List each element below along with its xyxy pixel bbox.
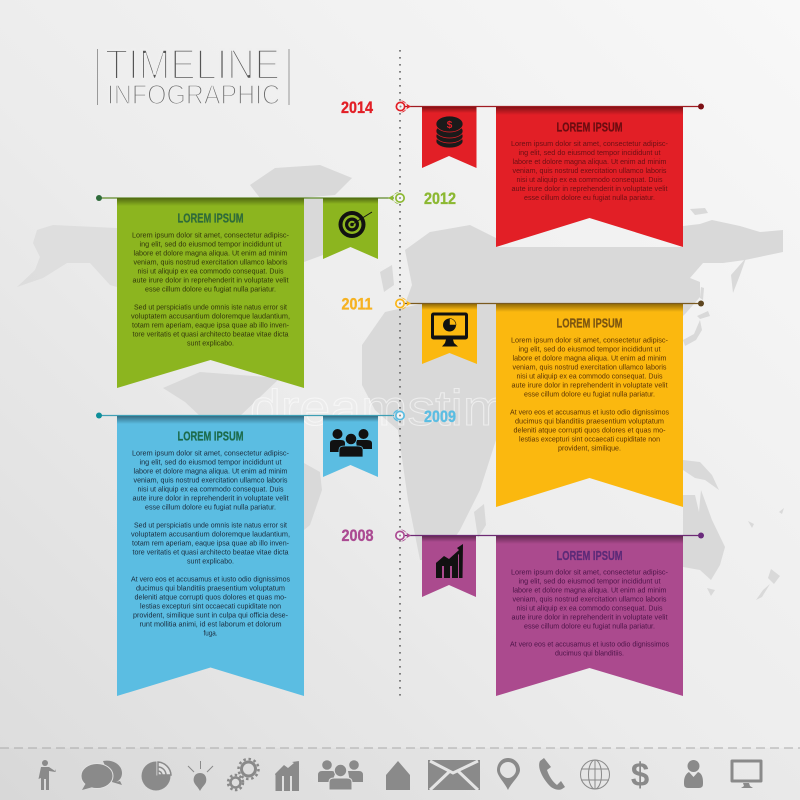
- timeline pin: [388, 192, 405, 204]
- body text: aute irure dolor in reprehenderit in voluptate velit: [132, 276, 289, 284]
- icon: people: [330, 429, 372, 457]
- panel: 2008: [342, 526, 704, 696]
- body text: labore et dolore magna aliqua. Ut enim ad minim: [134, 466, 288, 476]
- icon: envelope: [428, 760, 480, 790]
- year: 2012: [424, 189, 456, 208]
- icon: coins: $: [447, 120, 453, 131]
- icon: target: [338, 211, 372, 238]
- body text: sunt explicabo.: [187, 338, 234, 348]
- timeline pin: [396, 100, 411, 112]
- main ribbon: [496, 107, 683, 247]
- title: INFOGRAPHIC: [107, 79, 280, 110]
- body text: ing elit, sed do eiusmod tempor incididunt ut: [518, 148, 661, 157]
- body text: nisi ut aliquip ex ea commodo consequat. Duis: [516, 604, 663, 612]
- body text: Lorem ipsum dolor sit amet, consectetur adipisc-: [132, 448, 289, 458]
- icon: group of people: [318, 760, 363, 790]
- body text: lestias excepturi sint occaecati cupiditate non: [140, 602, 281, 610]
- year: 2008: [342, 526, 374, 545]
- body text: fuga.: [204, 628, 218, 638]
- body text: [510, 568, 669, 658]
- icon: monitor: [431, 312, 468, 346]
- panel: 2011: [342, 294, 704, 507]
- icon: gears: [228, 759, 258, 790]
- timeline pin: [392, 410, 405, 422]
- year: 2011: [342, 294, 372, 314]
- body text: At vero eos et accusamus et iusto odio dignissimos: [510, 408, 669, 416]
- icon: dollar sign: $: [631, 756, 649, 793]
- connector line: [405, 300, 704, 306]
- connector line: [405, 532, 704, 538]
- body text: voluptatem accusantium doloremque laudantium,: [131, 530, 290, 538]
- body text: ducimus qui blanditiis praesentium voluptatum: [136, 584, 285, 592]
- body text: Sed ut perspiciatis unde omnis iste natus error sit: [134, 302, 288, 312]
- body text: ing elit, sed do eiusmod tempor incididunt ut: [518, 344, 661, 354]
- body text: nisi ut aliquip ex ea commodo consequat. Duis: [138, 484, 284, 494]
- body text: veniam, quis nostrud exercitation ullamco laboris: [512, 594, 667, 604]
- body text: provident, similique.: [558, 444, 621, 452]
- body text: At vero eos et accusamus et iusto odio dignissimos: [510, 640, 669, 648]
- body text: aute irure dolor in reprehenderit in voluptate velit: [512, 380, 668, 390]
- title: [97, 41, 290, 110]
- body text: deleniti atque corrupti quos dolores et quas mo-: [514, 426, 666, 434]
- body text: Lorem ipsum dolor sit amet, consectetur adipisc-: [511, 568, 668, 576]
- body text: At vero eos et accusamus et iusto odio dignissimos: [131, 574, 290, 584]
- body text: [510, 336, 669, 452]
- body text: nisi ut aliquip ex ea commodo consequat. Duis: [138, 266, 284, 276]
- body text: Lorem ipsum dolor sit amet, consectetur adipisc-: [511, 139, 668, 148]
- body text: esse cillum dolore eu fugiat nulla pariatur.: [145, 284, 276, 294]
- body text: runt mollitia animi, id est laborum et dolorum: [140, 620, 282, 628]
- body text: totam rem aperiam, eaque ipsa quae ab illo inven-: [132, 538, 289, 548]
- body text: [131, 230, 290, 348]
- heading: LOREM IPSUM: [556, 316, 622, 330]
- body text: aute irure dolor in reprehenderit in voluptate velit: [132, 494, 289, 502]
- body text: nisi ut aliquip ex ea commodo consequat. Duis: [516, 175, 663, 184]
- body text: labore et dolore magna aliqua. Ut enim ad minim: [512, 354, 666, 362]
- main ribbon: [117, 416, 304, 696]
- body text: ducimus qui blanditiis.: [555, 648, 624, 658]
- icon: growth chart: [436, 544, 463, 578]
- body text: esse cillum dolore eu fugiat nulla pariatur.: [524, 193, 655, 202]
- body text: lestias excepturi sint occaecati cupiditate non: [519, 434, 660, 444]
- body text: provident, similique sunt in culpa qui officia dese-: [133, 610, 288, 620]
- icon: telephone: [539, 758, 565, 790]
- year: 2009: [424, 407, 456, 426]
- body text: esse cillum dolore eu fugiat nulla pariatur.: [524, 622, 655, 630]
- body text: nisi ut aliquip ex ea commodo consequat. Duis: [516, 372, 663, 380]
- body text: aute irure dolor in reprehenderit in voluptate velit: [512, 612, 668, 622]
- body text: Lorem ipsum dolor sit amet, consectetur adipisc-: [511, 336, 668, 344]
- small ribbon with monitor icon: [422, 304, 477, 364]
- connector line: [96, 195, 394, 201]
- body text: voluptatem accusantium doloremque laudantium,: [131, 312, 290, 320]
- icon: house: [386, 761, 410, 790]
- small ribbon with coins icon: [422, 107, 476, 168]
- body text: ing elit, sed do eiusmod tempor incididunt ut: [140, 240, 282, 248]
- icon: growth chart: [275, 761, 299, 791]
- dotted timeline axis: [399, 50, 401, 698]
- body text: deleniti atque corrupti quos dolores et quas mo-: [134, 592, 287, 602]
- body text: Sed ut perspiciatis unde omnis iste natus error sit: [134, 520, 288, 530]
- body text: esse cillum dolore eu fugiat nulla pariatur.: [524, 390, 655, 398]
- icon: presenter: [38, 760, 56, 790]
- body text: ing elit, sed do eiusmod tempor incididunt ut: [518, 576, 661, 586]
- panel: 2012: [96, 189, 456, 388]
- body text: ducimus qui blanditiis praesentium voluptatum: [515, 416, 664, 426]
- main ribbon: [117, 198, 304, 388]
- body text: [131, 448, 290, 638]
- body text: aute irure dolor in reprehenderit in voluptate velit: [512, 184, 668, 193]
- body text: tore veritatis et quasi architecto beatae vitae dicta: [132, 330, 289, 338]
- body text: labore et dolore magna aliqua. Ut enim ad minim: [512, 157, 666, 166]
- body text: veniam, quis nostrud exercitation ullamco laboris: [512, 362, 667, 372]
- body text: veniam, quis nostrud exercitation ullamco laboris: [134, 476, 288, 484]
- small ribbon with people icon: [323, 416, 378, 477]
- small ribbon with target icon: [323, 198, 378, 259]
- body text: esse cillum dolore eu fugiat nulla pariatur.: [145, 502, 276, 512]
- watermark: dreamstime: [250, 380, 540, 436]
- small ribbon with chart icon: [422, 536, 476, 597]
- body text: ing elit, sed do eiusmod tempor incididunt ut: [140, 458, 282, 466]
- icon row: [38, 756, 761, 793]
- panel: 2009: [96, 407, 456, 696]
- body text: veniam, quis nostrud exercitation ullamco laboris: [512, 166, 667, 175]
- body text: tore veritatis et quasi architecto beatae vitae dicta: [132, 548, 289, 556]
- body text: veniam, quis nostrud exercitation ullamco laboris: [134, 258, 288, 266]
- icon: user: [684, 760, 703, 788]
- heading: LOREM IPSUM: [178, 212, 244, 226]
- icon: pie chart: [142, 761, 171, 790]
- body text: sunt explicabo.: [187, 556, 234, 566]
- icon: monitor: [732, 761, 761, 788]
- title: TIMELINE: [105, 41, 280, 89]
- body text: [511, 139, 668, 202]
- timeline pin: [395, 298, 411, 310]
- icon: light bulb: [188, 761, 213, 791]
- icon: map pin: [497, 758, 520, 790]
- heading: LOREM IPSUM: [178, 430, 244, 444]
- body text: labore et dolore magna aliqua. Ut enim ad minim: [134, 248, 288, 258]
- timeline pin: [395, 530, 411, 542]
- panel: 2014: [341, 98, 704, 247]
- heading: LOREM IPSUM: [556, 549, 622, 563]
- world map background: [17, 165, 784, 600]
- icon: globe: [580, 760, 610, 789]
- main ribbon: [496, 536, 683, 696]
- heading: LOREM IPSUM: [556, 120, 622, 134]
- body text: labore et dolore magna aliqua. Ut enim ad minim: [512, 586, 666, 594]
- icon: speech bubbles: [81, 761, 122, 790]
- body text: Lorem ipsum dolor sit amet, consectetur adipisc-: [132, 230, 289, 240]
- connector line: [96, 412, 394, 418]
- year: 2014: [341, 98, 373, 117]
- main ribbon: [496, 304, 683, 507]
- connector line: [405, 104, 704, 110]
- body text: totam rem aperiam, eaque ipsa quae ab illo inven-: [132, 320, 289, 330]
